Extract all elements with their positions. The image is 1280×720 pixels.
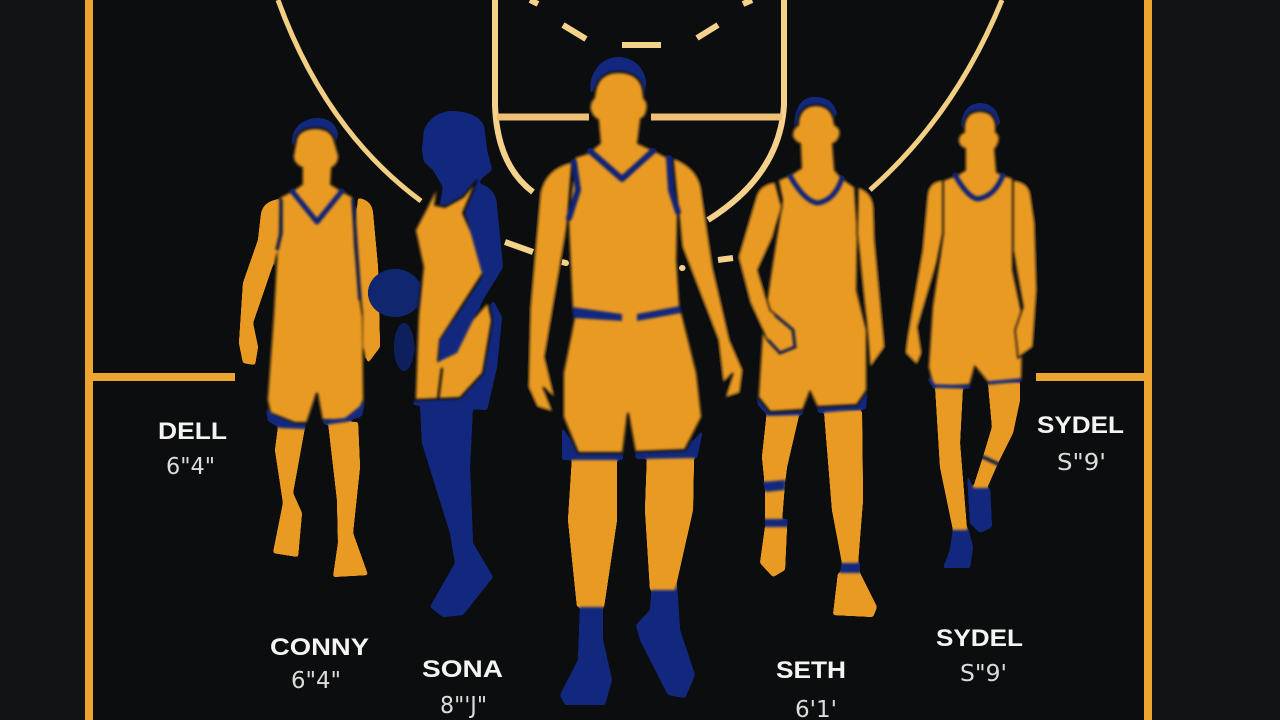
label: Sona: [422, 656, 503, 719]
collar: [955, 175, 1003, 199]
free throw dashes bottom: [505, 242, 733, 260]
jersey slit: [438, 368, 442, 400]
jersey: [415, 180, 492, 400]
label: Sydel lower: [936, 625, 1023, 687]
waistband: [572, 306, 681, 321]
name: SETH: [776, 657, 846, 684]
name: DELL: [158, 418, 227, 445]
right baseline segment: [1036, 373, 1144, 381]
three point arc left: [278, 0, 421, 201]
collar and arm trim: [590, 151, 653, 179]
name: SONA: [422, 656, 503, 683]
player: Seth: [738, 97, 885, 617]
back arm shadow: [394, 323, 414, 371]
player: Dell: [239, 118, 380, 577]
player: Sona: [368, 111, 503, 617]
torso and shorts: [928, 111, 1023, 387]
hair: [794, 97, 837, 125]
legs: [935, 383, 1020, 530]
arms: [738, 182, 885, 368]
three point arc right: [870, 0, 1002, 190]
player: Sydel: [905, 103, 1037, 568]
basketball: [368, 269, 422, 317]
height: S"9': [960, 661, 1007, 687]
leg bands: [763, 480, 860, 573]
name: SYDEL: [936, 625, 1023, 652]
legs: [568, 456, 694, 607]
free throw dashes top: [530, 0, 752, 45]
key right side: [708, 0, 784, 220]
player: center: [528, 57, 743, 705]
legs: [760, 411, 863, 577]
height: 6"4": [166, 454, 215, 480]
arms: [239, 198, 380, 365]
shoes: [943, 473, 992, 568]
height: S"9': [1057, 450, 1106, 476]
arm: [438, 183, 503, 362]
shorts trim: [266, 400, 365, 429]
jersey and body: [267, 128, 364, 423]
height: 6"4": [291, 668, 341, 694]
socks and shoes: [560, 585, 695, 705]
ankle band: [983, 457, 998, 464]
arms: [528, 158, 743, 412]
leg: [420, 405, 493, 617]
hair: [292, 118, 338, 145]
height: 8"'J": [440, 693, 487, 719]
torso and shorts: [758, 105, 867, 412]
key left side: [495, 0, 533, 192]
jersey trim: [292, 191, 342, 222]
free throw line: [497, 114, 782, 120]
hair: [590, 57, 646, 95]
free throw dots: [562, 262, 682, 268]
shorts trim: [562, 427, 703, 460]
shorts trim: [756, 392, 867, 416]
left sideline: [85, 0, 93, 720]
head and hair: [422, 111, 492, 205]
label: Dell upper left: [158, 418, 227, 480]
label: Sydel upper right: [1037, 412, 1124, 476]
name: CONNY: [270, 634, 369, 661]
shorts hem: [929, 378, 1021, 387]
torso and shorts: [563, 72, 702, 453]
hand outline: [768, 315, 795, 353]
label: Seth: [776, 657, 846, 720]
hair: [961, 103, 1000, 127]
name: SYDEL: [1037, 412, 1124, 439]
legs: [273, 422, 368, 577]
collar: [790, 176, 842, 203]
label: Conny: [270, 634, 369, 694]
shoe: [833, 573, 877, 617]
left baseline segment: [93, 373, 235, 381]
right sideline: [1144, 0, 1152, 720]
shorts back: [413, 300, 502, 410]
arms: [905, 180, 1037, 365]
